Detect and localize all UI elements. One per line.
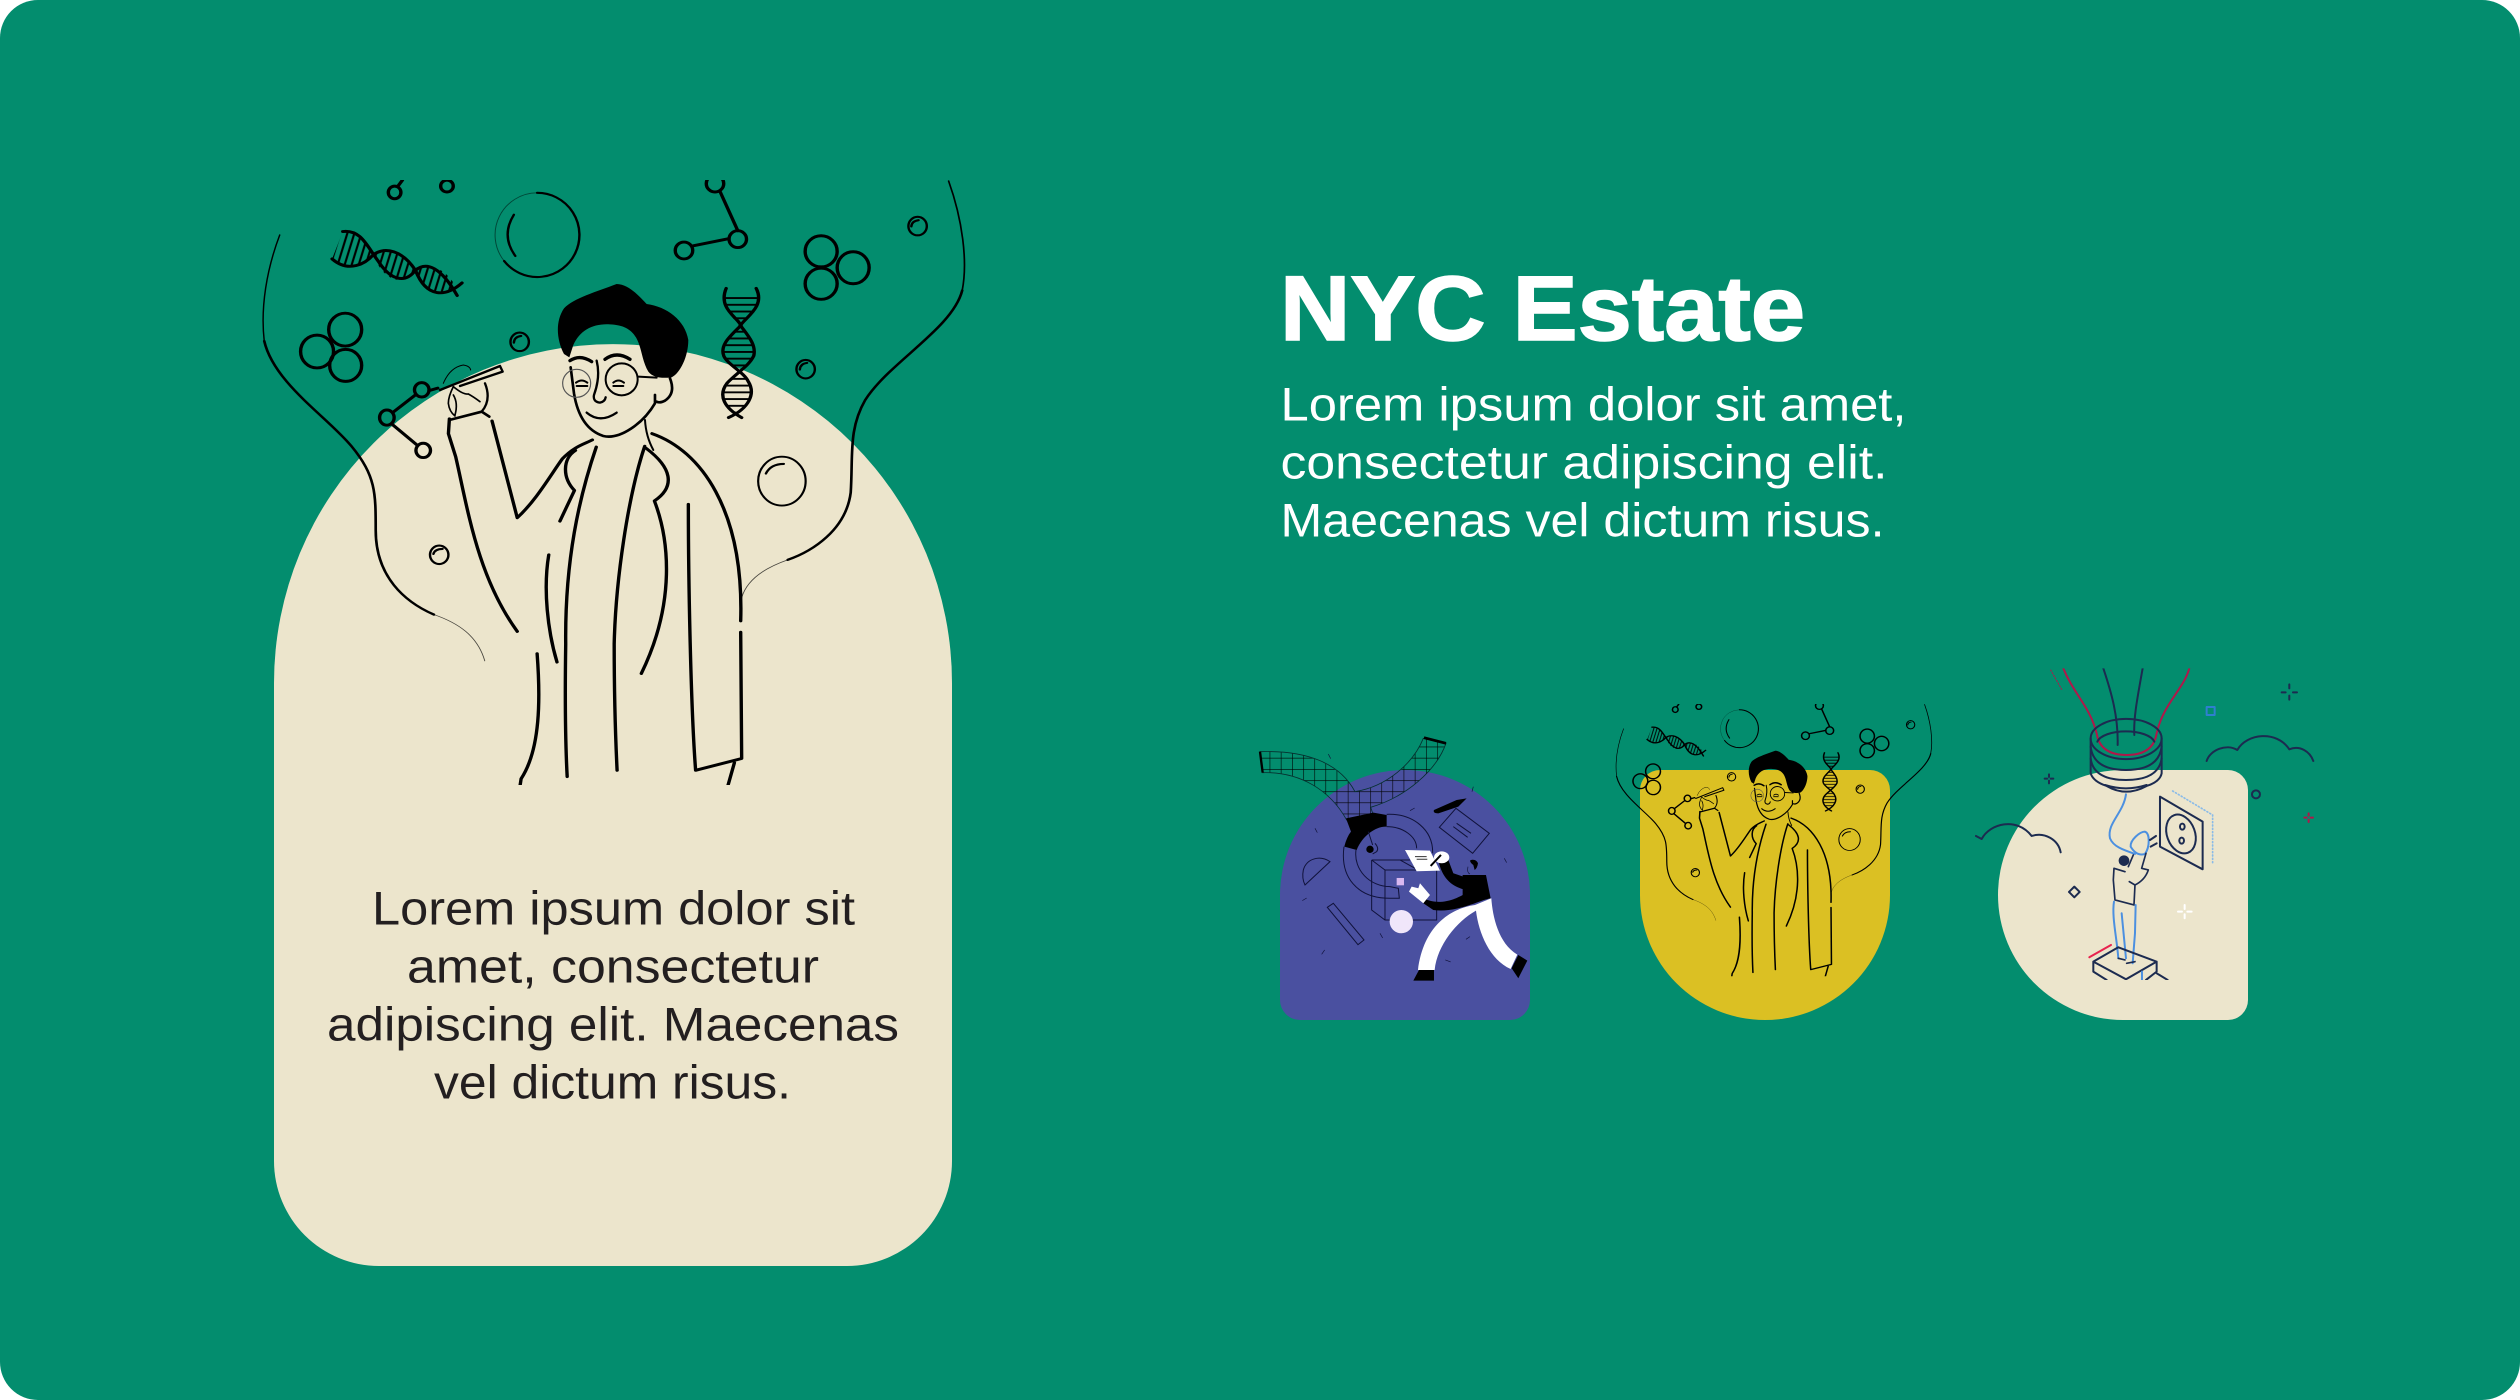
- illustration: man plugging in a bulb: [1976, 668, 2313, 980]
- checked trousers: [1260, 738, 1446, 820]
- bulb wires: [2063, 668, 2189, 755]
- man on block: [2119, 855, 2129, 866]
- panel: main arch card: [263, 175, 964, 1266]
- illustration: scientist with molecules: [263, 175, 964, 785]
- small bubbles: [430, 217, 927, 564]
- yellow shape: [1640, 770, 1890, 1020]
- arch shape: [274, 344, 952, 1266]
- glasses: [563, 369, 591, 397]
- beige shape: [1998, 770, 2248, 1020]
- DNA diagonal: [332, 231, 462, 296]
- illustration: small scientist: [1616, 702, 1932, 976]
- panel caption: amet, consectetur: [407, 940, 819, 992]
- face: [571, 367, 655, 437]
- description text: [1280, 378, 1906, 546]
- three circles right: [805, 236, 869, 299]
- card: yellow shape with scientist: [1616, 702, 1932, 1020]
- hair: [558, 284, 688, 378]
- small marks: [2207, 707, 2215, 715]
- pencil and hand: [440, 366, 503, 412]
- clouds: [2207, 736, 2313, 761]
- shapes: [1303, 858, 1330, 885]
- sparkles: [2282, 684, 2297, 700]
- purple shape: [1280, 770, 1530, 1020]
- three circles left: [301, 313, 362, 381]
- head, glasses and raised hand: [440, 284, 688, 450]
- title: NYC Estate: [1280, 258, 1805, 360]
- coat and arm lines: [448, 419, 742, 785]
- top molecule fragments: [388, 180, 453, 199]
- panel caption: adipiscing elit. Maecenas: [327, 998, 899, 1050]
- panel caption: Lorem ipsum dolor sit: [372, 882, 855, 934]
- right wavy line: [742, 181, 964, 598]
- description text: Maecenas vel dictum risus.: [1280, 494, 1884, 546]
- big bubble: [495, 193, 579, 277]
- orb and square: [1390, 910, 1413, 933]
- card: beige shape with bulb illustration: [1976, 668, 2313, 1020]
- socket: [2160, 797, 2203, 869]
- left wavy line: [263, 235, 485, 661]
- black shirt and arm: [1344, 813, 1387, 850]
- cable and plug: [2110, 794, 2135, 854]
- description text: consectetur adipiscing elit.: [1280, 436, 1888, 488]
- molecule top right: [675, 175, 747, 259]
- panel caption: [327, 882, 899, 1108]
- description text: Lorem ipsum dolor sit amet,: [1280, 378, 1906, 430]
- illustration: people with box: [1260, 738, 1527, 981]
- panel caption: vel dictum risus.: [434, 1056, 791, 1108]
- card: purple arch with illustration: [1260, 738, 1530, 1020]
- box: [1372, 860, 1437, 920]
- standing man: [1418, 898, 1517, 970]
- bulb base: [2091, 719, 2162, 759]
- DNA vertical: [723, 288, 759, 418]
- molecule at pencil: [380, 383, 438, 458]
